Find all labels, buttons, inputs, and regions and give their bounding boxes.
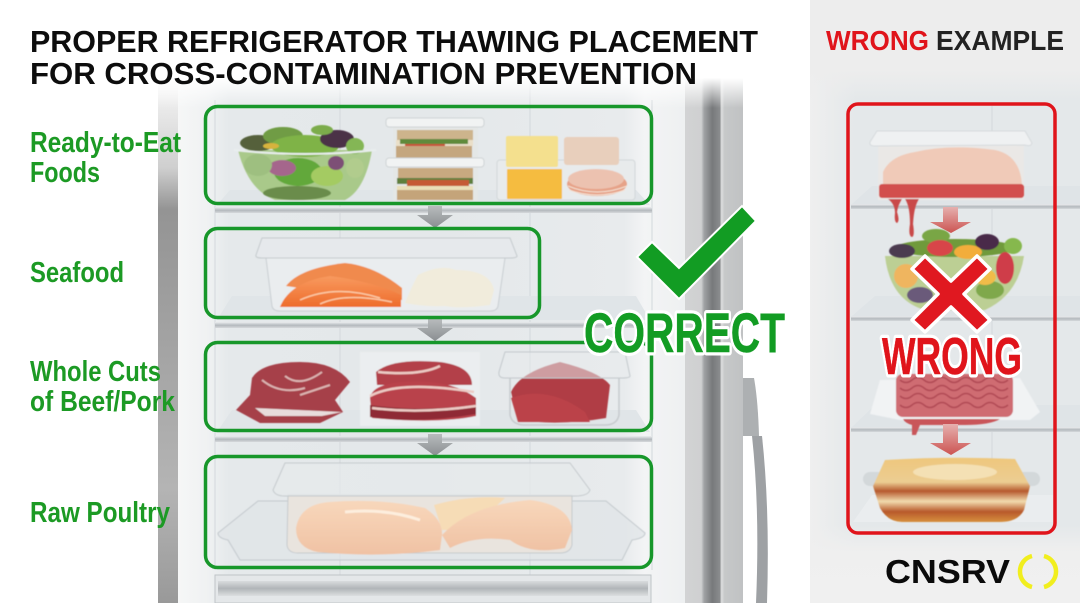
bowl [885,256,1024,310]
vacuum pack steak 2 [360,352,480,426]
sandwich containers [386,118,484,201]
shelf 2 glass [217,296,650,320]
green letters: CORRECT [584,301,785,364]
cheese and ham tray [497,136,635,200]
label: ready-to-eat foods: Ready-to-Eat [30,127,181,159]
wrong shelf 1 [852,186,1080,204]
wrong: red X icon [912,256,990,332]
drip tray [218,501,645,560]
shelf 3 glass [217,410,650,432]
chicken pieces [296,497,572,555]
bottom drawer band [218,581,648,596]
container body [878,144,1024,200]
container lid [256,238,517,258]
shelves [215,190,652,603]
arrow 3 [417,434,453,456]
fridge scene [150,0,790,603]
green box: raw poultry [206,456,652,568]
panel top fade [810,0,1080,100]
wrong stamp text [882,328,1022,386]
fridge interior wall [178,75,685,603]
downward arrows: correct side [417,206,453,456]
berries and fruit [889,234,1022,303]
ground meat [896,374,1013,417]
paper [870,378,1040,420]
blood drip 1 [888,199,902,223]
wrong shelf 4 [853,495,1053,522]
label: whole cuts of beef/pork: Whole Cuts [30,356,161,388]
shelf 2 front [215,322,652,328]
white fish [405,268,494,307]
white halo: CORRECT [584,301,785,364]
wrong shelf 3 front [851,427,1080,432]
shelf 1 glass [217,190,650,205]
raw chicken [883,147,1022,185]
wrong shelf 2 front [851,316,1080,321]
arrow 1 [417,206,453,228]
label: seafood: Seafood [30,257,124,289]
interior seams [991,106,993,520]
title: FOR CROSS-CONTAMINATION PREVENTION [30,56,697,91]
salmon fillets [280,263,402,307]
top white fade behind title [150,0,790,108]
meat texture [900,378,1008,408]
bottom drawer frame [215,575,651,603]
right panel background [810,0,1080,603]
leaf clusters [922,229,950,243]
lasagna body [873,458,1030,522]
wrong shelf 1 front [851,204,1080,209]
interior panel seams [215,75,652,600]
dish handles [863,472,1040,486]
blood drip 2 [905,199,919,237]
door frame: left [158,75,178,603]
food: ready-to-eat shelf [234,118,635,201]
fridge handle mount [743,378,759,436]
label: raw poultry: Raw Poultry [30,497,170,529]
cheese highlight [913,464,997,480]
food: beef and pork shelf [236,352,630,426]
leaves top [895,239,1015,257]
title: PROPER REFRIGERATOR THAWING PLACEMENT [30,24,758,59]
green box: seafood [206,228,540,318]
salad bowl [234,125,376,200]
wrong example scene [810,0,1080,603]
wrong shelf 2 [852,296,1080,316]
CNSRV logo [885,553,1056,590]
wrong example heading: WRONG [826,25,929,56]
green box: whole cuts [206,342,652,430]
wrong: ground meat on paper [870,374,1040,435]
correct checkmark icon [637,206,756,299]
fridge handle bar [752,436,768,603]
juice under meat [903,419,1000,435]
label: ready-to-eat foods: Foods [30,157,100,189]
wrong: red arrow 1 [930,207,971,233]
food: raw poultry shelf [218,463,645,560]
wrong: lasagna dish [863,458,1040,522]
correct label [584,301,785,364]
lid [870,131,1032,146]
green box: ready-to-eat [206,106,652,204]
pooled red juice [879,184,1024,198]
arrow 2 [417,319,453,341]
logo wordmark: CNSRV [885,553,1010,590]
container of beef [499,352,630,425]
shelf 3 front [215,436,652,442]
label: whole cuts of beef/pork: of Beef/Pork [30,386,176,418]
wrong: fruit salad bowl [885,229,1024,310]
container body [266,258,505,311]
wrong example heading: EXAMPLE [936,25,1064,56]
vacuum pack steak 1 [236,362,350,423]
panel bottom fade [810,525,1080,603]
food: seafood container [256,238,517,311]
poultry container body [287,495,572,553]
door frame: right [685,75,743,603]
red wrong panel border [848,104,1055,533]
wrong: red arrow 2 [930,424,971,455]
poultry container lid [273,463,590,496]
logo ring [1020,556,1056,587]
shelf 1 front [215,207,652,213]
wrong: chicken container with juice [870,131,1032,237]
wrong shelf 3 [852,405,1080,427]
